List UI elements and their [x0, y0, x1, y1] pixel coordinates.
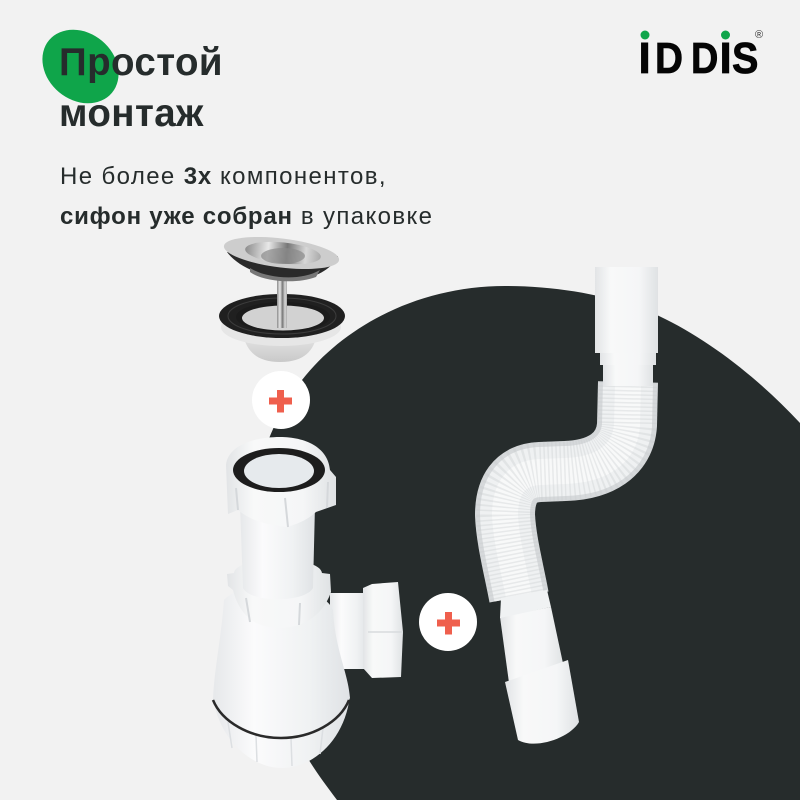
icon: green blob [28, 14, 133, 119]
logo: IDDIS [638, 34, 758, 83]
lower sleeve [500, 607, 564, 690]
logo registered mark: ® [755, 29, 763, 41]
stainless cap [222, 232, 341, 281]
logo: IDDIS: S [732, 34, 758, 83]
siphon bottle component [213, 437, 403, 768]
logo: IDDIS: D [655, 34, 683, 83]
siphon rubber ring [233, 448, 325, 492]
strainer drain component [219, 232, 345, 362]
black gasket [219, 294, 345, 338]
strainer flange [221, 308, 341, 346]
logo dots [640, 30, 730, 40]
title [59, 41, 223, 135]
logo: IDDIS: I [720, 34, 732, 83]
hose top neck [603, 362, 653, 386]
title: монтаж [59, 92, 204, 135]
dark background shape [250, 286, 800, 800]
plus badge: drain + siphon [252, 371, 310, 429]
logo: IDDIS: I [638, 34, 651, 83]
strainer cup [243, 334, 317, 362]
end coupling [505, 660, 579, 744]
siphon lower collar [227, 560, 331, 628]
siphon outlet nut [363, 582, 403, 678]
flexible corrugated pipe [500, 267, 658, 744]
collar lugs [246, 598, 300, 625]
description text: Не более 3х компонентов, [60, 163, 387, 190]
black seal line [213, 700, 349, 738]
description text: сифон уже собран в упаковке [60, 202, 433, 230]
corrugated hose [505, 382, 628, 597]
top socket [595, 267, 658, 353]
siphon bottom bowl [214, 702, 349, 768]
siphon vertical tube [240, 505, 315, 599]
hose bottom collar [500, 590, 551, 618]
siphon bottle body [213, 586, 350, 738]
description text [60, 163, 433, 230]
siphon top nut [226, 437, 336, 527]
nut ribs [236, 482, 328, 527]
siphon side outlet [330, 593, 368, 669]
bowl ribs [228, 722, 323, 766]
plus badge: siphon + hose [419, 593, 477, 651]
title: Простой [59, 41, 223, 84]
logo: IDDIS: D [690, 34, 718, 83]
threaded stem [277, 276, 287, 328]
